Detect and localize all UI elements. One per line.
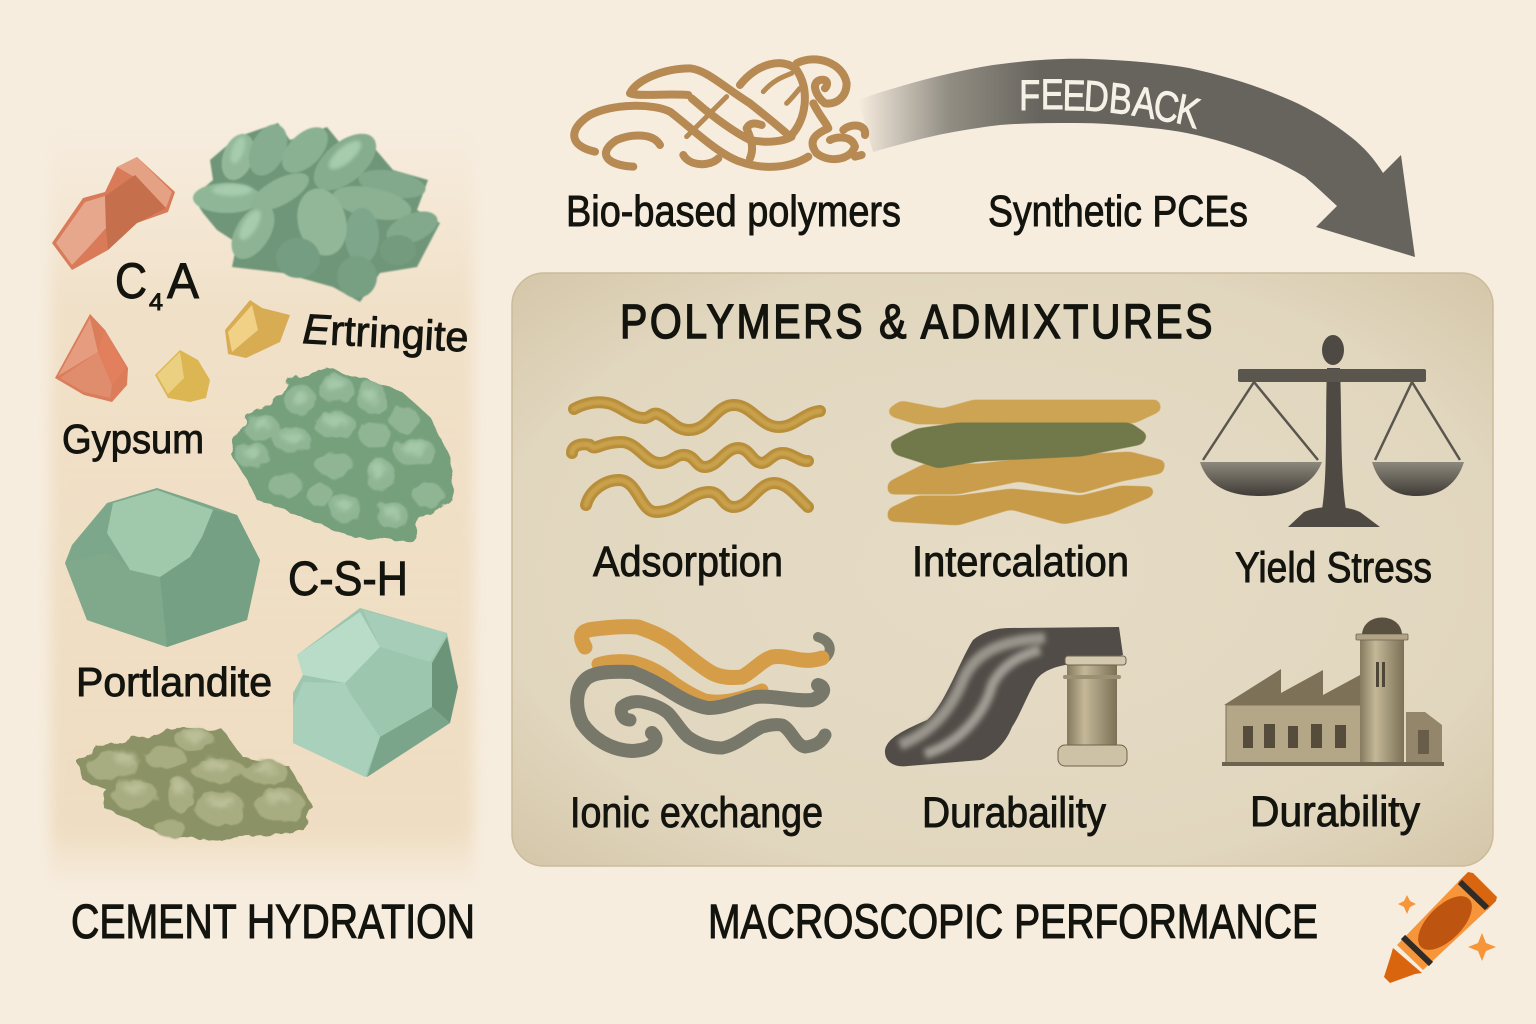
label: feedback: FEEDBACK (1019, 71, 1204, 139)
label: C-S-H: C-S-H (288, 553, 408, 606)
label: adsorption: Adsorption (593, 538, 783, 586)
heading: macroscopic performance: MACROSCOPIC PERFORMANCE (708, 896, 1318, 949)
heading: polymers and admixtures: POLYMERS & ADMIXTURES (620, 296, 1215, 349)
crystal: gold small (155, 350, 210, 402)
crystal: C-S-H lump (230, 368, 452, 542)
icon: ionic exchange swirls (577, 627, 830, 751)
panel: cement hydration (50, 118, 475, 949)
label: Ettringite: Ertringite (302, 305, 470, 361)
icon: wave highlights (572, 402, 820, 512)
icon: pipe and column (885, 627, 1127, 766)
label: Gypsum: Gypsum (62, 416, 204, 462)
icon: balance scales (1200, 335, 1464, 527)
label: durabaility: Durabaility (922, 789, 1106, 837)
label: yield stress: Yield Stress (1235, 544, 1432, 592)
icon: intercalation layers (889, 401, 1164, 524)
icon: crayon with sparkles (1384, 872, 1497, 983)
crystal: ettringite cluster (193, 118, 442, 302)
arrow: feedback (858, 59, 1415, 257)
label: C3A (115, 253, 200, 316)
label: C3A: C (115, 253, 147, 309)
icon: adsorption waves (572, 402, 820, 512)
crystal: gold large (225, 300, 290, 358)
label: durability: Durability (1250, 788, 1420, 836)
panel background (50, 120, 474, 890)
icon: bio-based polymer knot (574, 59, 865, 167)
top row: polymers and feedback (566, 59, 1415, 257)
label: synthetic PCEs: Synthetic PCEs (988, 187, 1248, 236)
label: Portlandite: Portlandite (76, 659, 272, 705)
crystal: pale polyhedron (293, 608, 458, 777)
label: bio-based polymers: Bio-based polymers (566, 187, 901, 236)
icon: factory (1222, 618, 1444, 766)
label: intercalation: Intercalation (912, 538, 1129, 586)
label: C3A: 4 (149, 289, 163, 316)
crystal: olive lump (78, 727, 313, 840)
label: C3A: A (167, 253, 200, 309)
heading: cement hydration: CEMENT HYDRATION (71, 896, 475, 949)
label: ionic exchange: Ionic exchange (570, 789, 823, 837)
crystal: C3A large red (52, 157, 175, 270)
crystal: portlandite polyhedron (65, 488, 260, 647)
panel: polymers and admixtures (512, 273, 1493, 866)
crystal: small red (55, 314, 128, 402)
panel background (512, 273, 1493, 866)
